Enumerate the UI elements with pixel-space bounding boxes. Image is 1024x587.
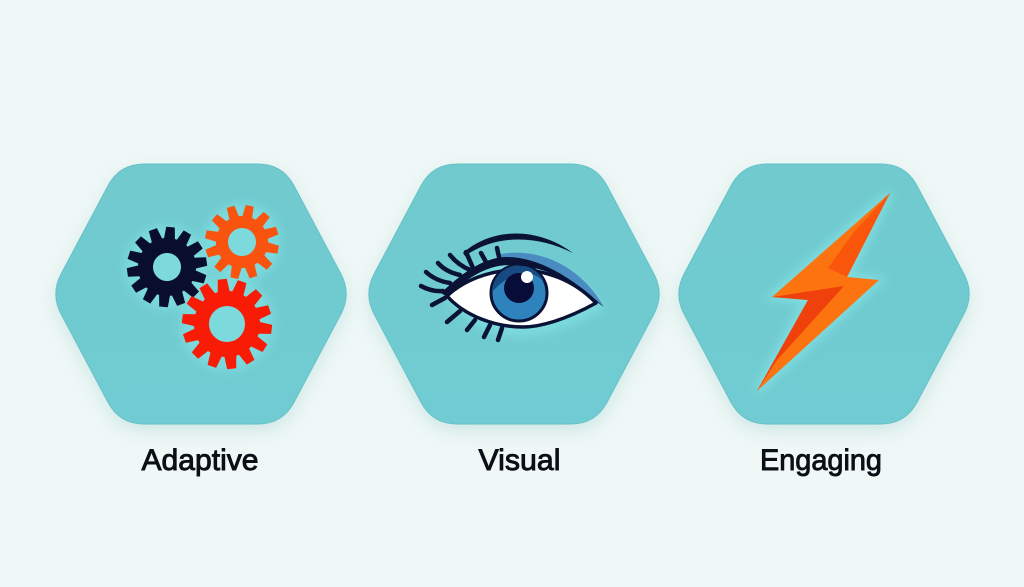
bolt upper facet <box>828 193 890 277</box>
gear: red <box>177 275 277 373</box>
label: engaging: Engaging <box>760 444 882 477</box>
upper lid <box>441 257 604 307</box>
panel: engaging <box>679 164 969 477</box>
hexagon: engaging <box>679 164 969 424</box>
highlight <box>521 271 533 283</box>
label: visual: Visual <box>478 444 560 477</box>
pupil <box>504 273 534 303</box>
icon: gears <box>123 198 286 373</box>
gear: orange <box>198 198 286 286</box>
panel: visual <box>369 164 659 477</box>
lashes <box>421 248 502 340</box>
eye shadow <box>501 253 604 307</box>
iris shade <box>492 265 544 292</box>
hexagon: adaptive <box>56 164 346 424</box>
hexagon: visual <box>369 164 659 424</box>
label: adaptive: Adaptive <box>142 444 258 477</box>
gear: navy <box>123 224 211 310</box>
eyebrow <box>463 233 573 256</box>
bolt middle facet <box>757 286 844 391</box>
panel: adaptive <box>56 164 346 477</box>
icon: lightning bolt <box>757 193 890 391</box>
iris <box>491 265 547 321</box>
sclera <box>447 270 596 327</box>
bolt body <box>757 193 890 391</box>
icon: eye <box>421 233 604 340</box>
